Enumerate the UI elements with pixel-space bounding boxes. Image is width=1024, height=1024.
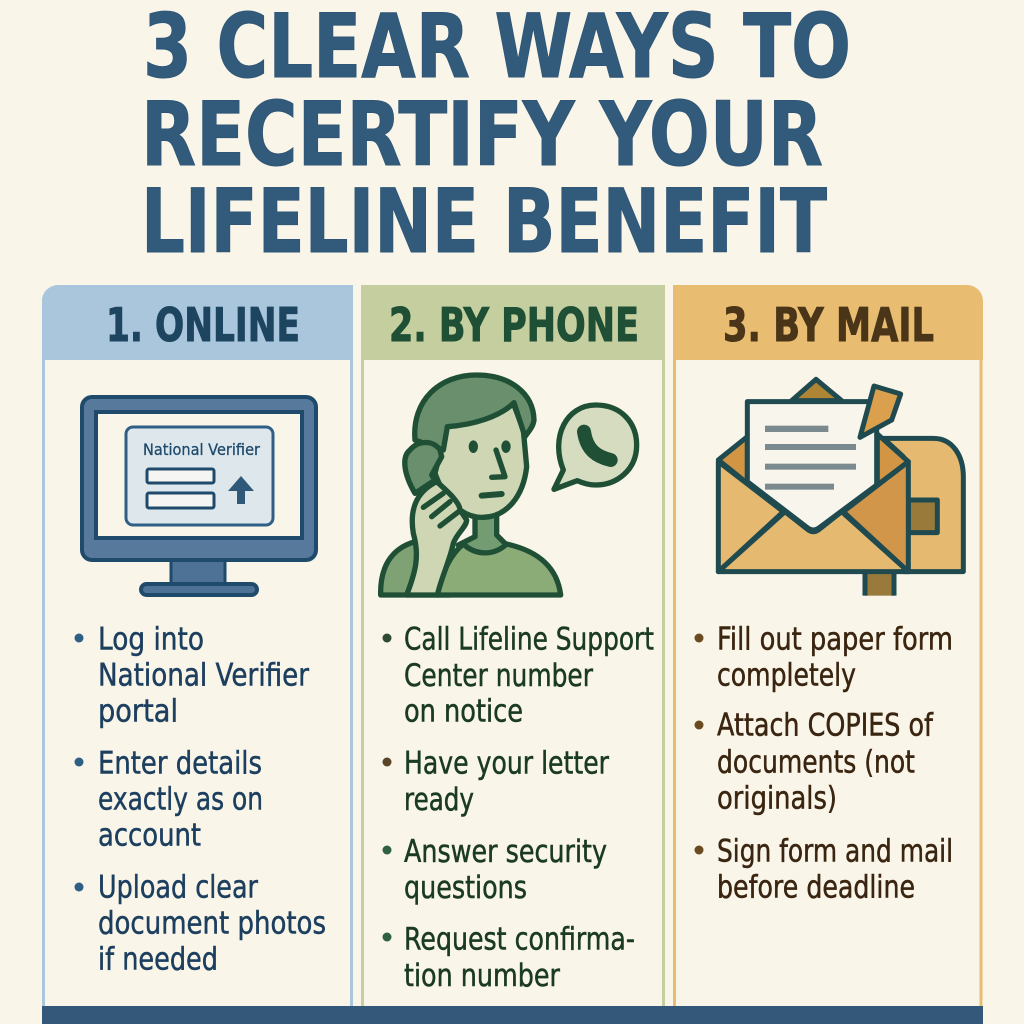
bullet list: online: Upload clear [98, 870, 258, 906]
header: by phone: 2. BY PHONE [389, 298, 639, 352]
bullet list: online: portal [98, 694, 178, 730]
panel: by mail [673, 285, 983, 1006]
bullet list: by phone: on notice [404, 694, 523, 730]
bullet list: by phone: ready [404, 782, 474, 818]
header: by mail: 3. BY MAIL [723, 298, 934, 352]
footer band [42, 1006, 983, 1024]
bullet list: online: document photos [98, 906, 326, 942]
title: LIFELINE BENEFIT [141, 170, 827, 273]
bullet list: by phone: Request confirma- [404, 922, 635, 958]
bullet list: by mail: Sign form and mail [717, 834, 953, 870]
bullet list: by mail: originals) [717, 780, 837, 816]
header: online: 1. ONLINE [106, 298, 300, 352]
bullet list: online [74, 622, 326, 978]
icon: person on phone [381, 375, 637, 595]
bullet list: by mail: completely [717, 658, 856, 694]
icon: computer monitor [82, 397, 316, 595]
bullet list: online: National Verifier [98, 658, 309, 694]
bullet list: by phone: tion number [404, 958, 560, 994]
bullet list: online: Enter details [98, 746, 262, 782]
bullet list: by phone: Answer security [404, 834, 607, 870]
bullet list: online: exactly as on [98, 782, 263, 818]
bullet list: by mail: before deadline [717, 870, 915, 906]
bullet list: online: account [98, 818, 201, 854]
bullet list: online: Log into [98, 622, 204, 658]
title: RECERTIFY YOUR [141, 83, 823, 186]
bullet list: by mail: Attach COPIES of [717, 708, 934, 744]
bullet list: by phone: Call Lifeline Support [404, 622, 654, 658]
panel: online [42, 285, 353, 1006]
title [141, 0, 851, 273]
icon: envelope and mailbox [718, 379, 963, 596]
bullet list: by mail: documents (not [717, 744, 915, 780]
bullet list: by phone: Have your letter [404, 746, 609, 782]
bullet list: online: if needed [98, 942, 218, 978]
bullet list: by mail [694, 622, 953, 906]
header: online [42, 285, 353, 360]
header: by mail [673, 285, 983, 360]
icon: computer monitor: National Verifier [143, 440, 260, 459]
bullet list: by phone [382, 622, 654, 994]
panel: by phone [361, 285, 665, 1006]
bullet list: by phone: Center number [404, 658, 593, 694]
bullet list: by mail: Fill out paper form [717, 622, 953, 658]
bullet list: by phone: questions [404, 870, 527, 906]
header: by phone [361, 285, 665, 360]
